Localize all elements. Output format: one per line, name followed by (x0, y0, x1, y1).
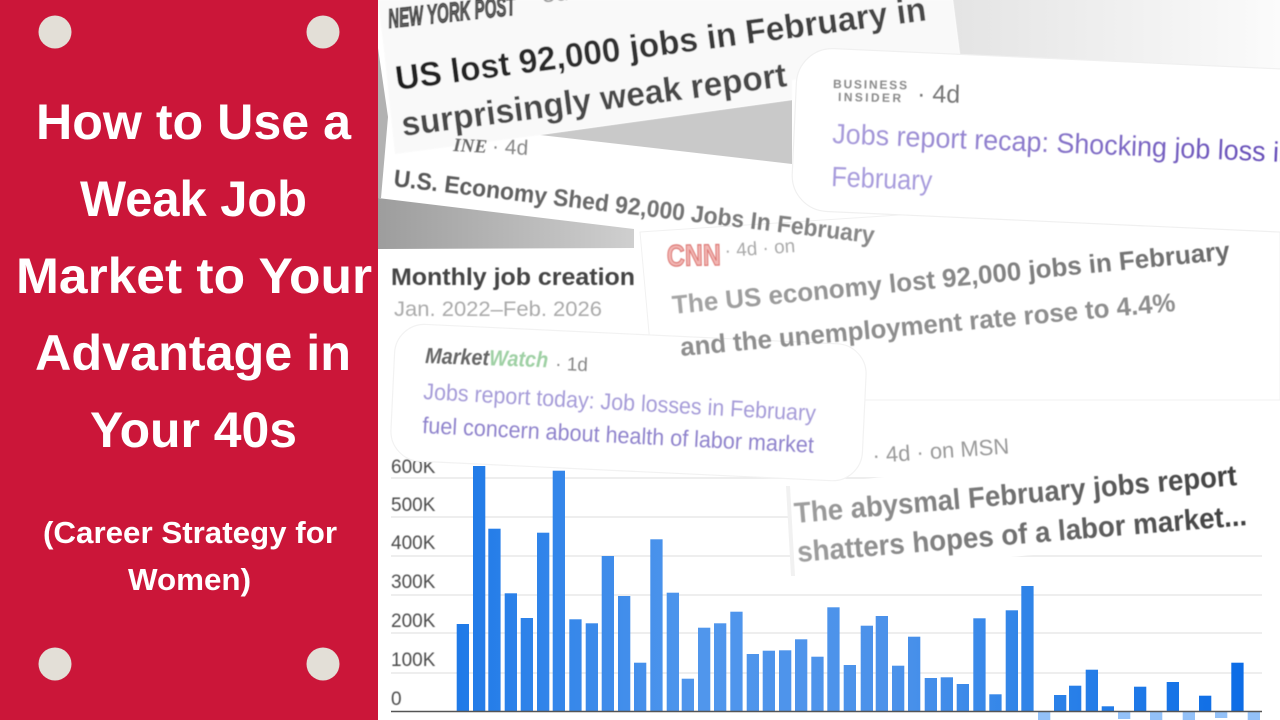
Economy headline: U.S. Economy Shed 92,000 Jobs In February (392, 165, 877, 249)
CNN headline line 2: and the unemployment rate rose to 4.4% (679, 287, 1176, 362)
subtitle: (Career Strategy for (43, 515, 337, 550)
title: Advantage in (35, 325, 351, 381)
positive bars (457, 466, 1244, 711)
chart title: Monthly job creation (391, 264, 635, 291)
y axis labels: 500K (391, 495, 436, 516)
Economy source and age: INE· 4d (452, 133, 529, 160)
chart date range: Jan. 2022–Feb. 2026 (394, 298, 602, 321)
bar chart: monthly job creation (391, 457, 1262, 720)
abysmal card age: · 4d · on MSN (872, 433, 1010, 468)
y axis labels: 0 (391, 689, 402, 710)
abysmal headline line 1: The abysmal February jobs report (793, 460, 1238, 530)
y axis labels (391, 457, 436, 710)
y axis labels: 100K (391, 650, 436, 671)
MarketWatch logo: MarketWatch (425, 343, 549, 372)
x axis baseline (391, 710, 1262, 712)
panel: U.S. Economy headline text (392, 133, 877, 249)
subtitle: Women) (128, 562, 251, 597)
title: How to Use a (36, 94, 352, 150)
panel: abysmal February headline card (786, 433, 1262, 576)
MarketWatch age: · 1d (555, 354, 588, 376)
background: screenshot collage (378, 0, 1280, 720)
Business Insider age: · 4d (917, 80, 960, 109)
title: Weak Job (80, 171, 307, 227)
panel: Business Insider headline card (791, 47, 1280, 235)
title: Market to Your (16, 248, 372, 304)
Business Insider logo second line: INSIDER (838, 90, 902, 105)
CNN age: · 4d · on (724, 236, 796, 262)
CNN logo: CNN (667, 239, 721, 273)
negative bars (1038, 711, 1260, 720)
CNN headline line 1: The US economy lost 92,000 jobs in February (671, 235, 1231, 320)
y axis labels: 200K (391, 611, 436, 632)
abysmal headline line 2: shatters hopes of a labor market... (796, 500, 1248, 569)
panel: red title sidebar (0, 0, 378, 720)
subtitle (43, 515, 337, 597)
panel: CNN headline text (667, 235, 1231, 362)
title: Your 40s (90, 402, 297, 458)
panel: New York Post headline card (378, 0, 961, 154)
y axis labels: 600K (391, 457, 436, 478)
panel: MarketWatch headline card (390, 323, 867, 482)
gridlines (391, 478, 1262, 673)
y axis labels: 300K (391, 572, 436, 593)
title (16, 94, 372, 458)
MarketWatch headline line 2: fuel concern about health of labor market (422, 412, 815, 458)
MarketWatch headline line 1: Jobs report today: Job losses in February (423, 378, 817, 426)
panel: CNN card background (640, 190, 1280, 400)
Business Insider logo: BUSINESS (833, 77, 907, 92)
New York Post headline line 2: surprisingly weak report (399, 56, 789, 144)
decorative pin dots (38, 16, 340, 680)
panel: chart heading (391, 264, 635, 321)
y axis labels: 400K (391, 533, 436, 554)
Business Insider headline line 2: February (831, 161, 933, 196)
